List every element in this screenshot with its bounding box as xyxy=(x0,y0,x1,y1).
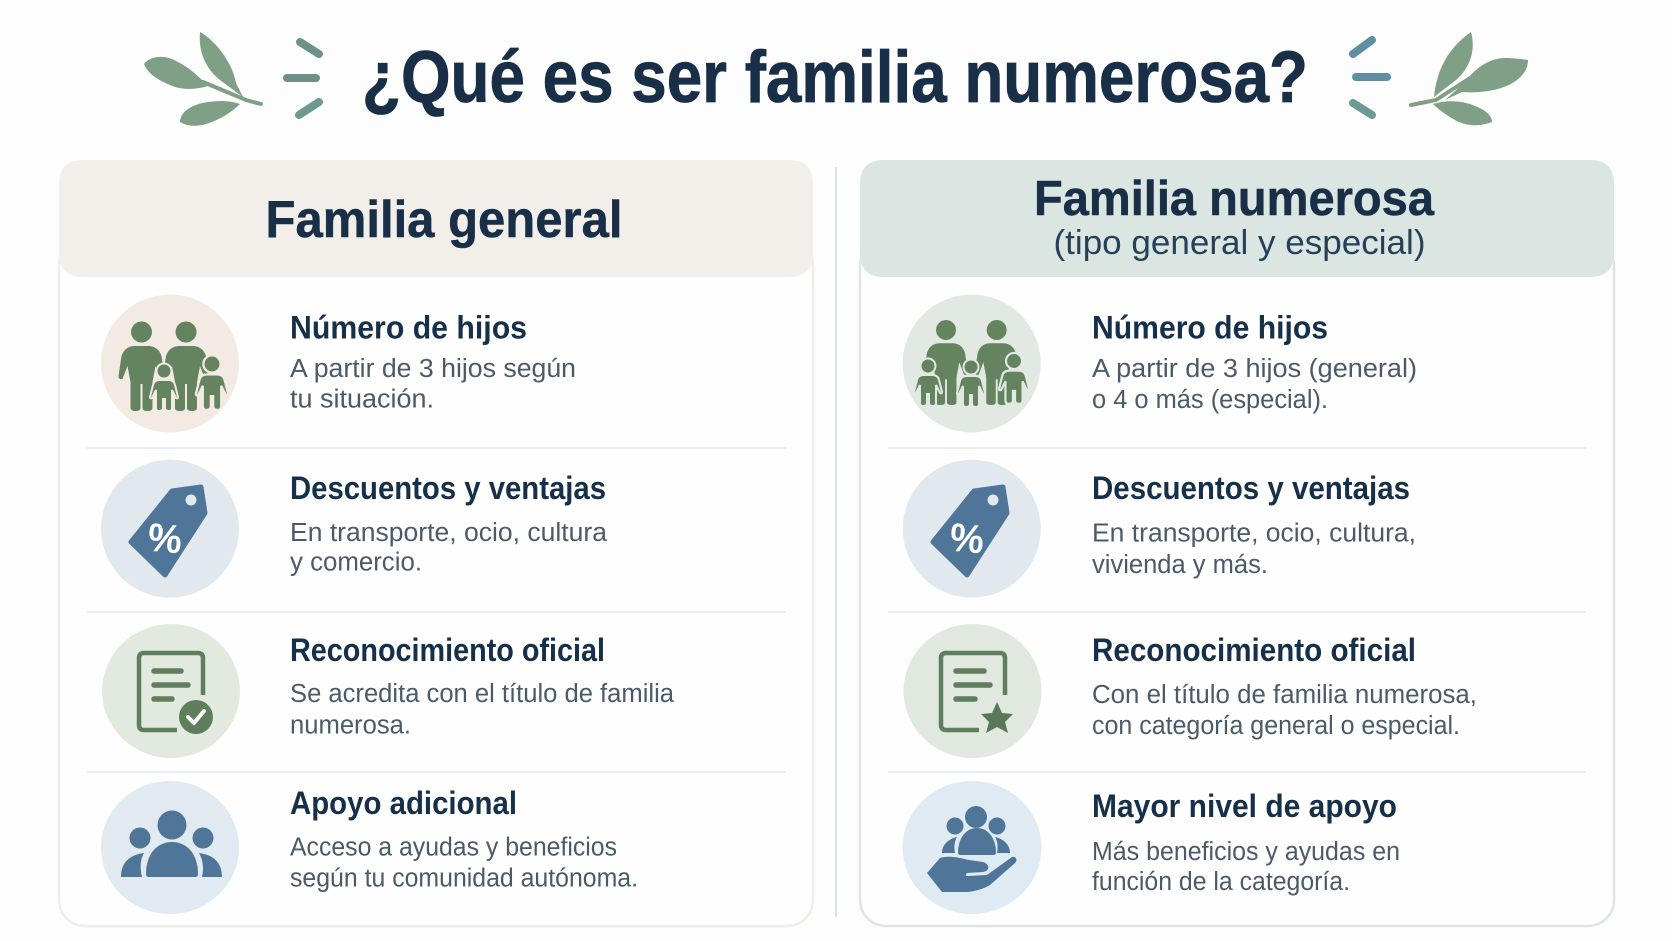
panel header xyxy=(860,160,1614,277)
icon: discount tag: % xyxy=(948,516,986,562)
text: Mayor nivel de apoyo: Más beneficios y ayudas en xyxy=(1092,838,1400,866)
row: Mayor nivel de apoyo xyxy=(902,781,1400,914)
icon: family of four xyxy=(101,294,239,432)
center divider xyxy=(835,167,837,917)
decoration: left dashes xyxy=(287,42,319,115)
panel: Familia general xyxy=(59,160,813,926)
text: Número de hijos xyxy=(290,310,576,414)
text: Número de hijos: Número de hijos xyxy=(1092,310,1328,346)
text: Reconocimiento oficial xyxy=(290,632,675,740)
text: Reconocimiento oficial: Con el título de familia numerosa, xyxy=(1092,681,1477,709)
icon: discount tag xyxy=(101,460,239,598)
icon: discount tag xyxy=(903,460,1041,598)
text: Descuentos y ventajas: vivienda y más. xyxy=(1092,551,1268,579)
text: Apoyo adicional xyxy=(290,785,638,892)
row: Descuentos y ventajas xyxy=(101,460,608,598)
row: Reconocimiento oficial xyxy=(904,624,1477,758)
text: Descuentos y ventajas xyxy=(1092,470,1416,579)
text: Descuentos y ventajas: Descuentos y ventajas xyxy=(1092,470,1410,506)
text: Mayor nivel de apoyo xyxy=(1092,788,1400,896)
decoration: right leaves xyxy=(1411,32,1528,125)
text: Descuentos y ventajas: En transporte, ocio, cultura xyxy=(290,519,608,547)
text: Reconocimiento oficial: Se acredita con el título de familia xyxy=(290,680,675,708)
text: Número de hijos: A partir de 3 hijos (general) xyxy=(1092,355,1417,383)
row: Apoyo adicional xyxy=(101,781,638,914)
row: Número de hijos xyxy=(101,294,576,432)
panel header xyxy=(59,160,813,277)
text: Descuentos y ventajas: y comercio. xyxy=(290,548,422,576)
icon: group of people xyxy=(101,781,239,914)
heading: Familia general: Familia general xyxy=(266,191,622,249)
heading: Familia numerosa: Familia numerosa xyxy=(1034,172,1435,226)
panel frame xyxy=(860,240,1614,926)
text: Descuentos y ventajas: En transporte, ocio, cultura, xyxy=(1092,520,1416,548)
subheading: tipo general y especial: (tipo general y especial) xyxy=(1054,224,1426,262)
text: Número de hijos: Número de hijos xyxy=(290,310,527,346)
decoration: right dashes xyxy=(1353,40,1387,115)
text: Reconocimiento oficial: con categoría general o especial. xyxy=(1092,712,1460,740)
text: Número de hijos: o 4 o más (especial). xyxy=(1092,386,1328,414)
text: Apoyo adicional: Apoyo adicional xyxy=(290,785,517,821)
text: Mayor nivel de apoyo: función de la categoría. xyxy=(1092,868,1350,896)
icon: hand holding people xyxy=(902,781,1042,914)
panel frame xyxy=(59,240,813,926)
text: Número de hijos xyxy=(1092,310,1417,414)
text: Número de hijos: tu situación. xyxy=(290,386,434,414)
text: Reconocimiento oficial: Reconocimiento oficial xyxy=(290,632,605,668)
text: Reconocimiento oficial: numerosa. xyxy=(290,712,411,740)
icon: document with star xyxy=(904,624,1042,758)
text: Descuentos y ventajas: Descuentos y ventajas xyxy=(290,470,606,506)
text: Descuentos y ventajas xyxy=(290,470,608,576)
icon: family of five xyxy=(903,294,1041,432)
row: Reconocimiento oficial xyxy=(102,624,675,758)
text: Apoyo adicional: según tu comunidad autónoma. xyxy=(290,864,638,892)
decoration: left leaves xyxy=(144,32,261,126)
title: ¿Qué es ser familia numerosa? xyxy=(362,37,1308,118)
text: Reconocimiento oficial: Reconocimiento oficial xyxy=(1092,632,1416,668)
row: Descuentos y ventajas xyxy=(903,460,1416,598)
row: Número de hijos xyxy=(903,294,1417,432)
icon: document with check xyxy=(102,624,240,758)
text: Reconocimiento oficial xyxy=(1092,632,1477,740)
text: Número de hijos: A partir de 3 hijos según xyxy=(290,355,576,383)
text: Apoyo adicional: Acceso a ayudas y beneficios xyxy=(290,834,617,862)
icon: discount tag: % xyxy=(146,516,184,562)
panel: Familia numerosa xyxy=(860,160,1614,926)
text: Mayor nivel de apoyo: Mayor nivel de apoyo xyxy=(1092,788,1397,824)
